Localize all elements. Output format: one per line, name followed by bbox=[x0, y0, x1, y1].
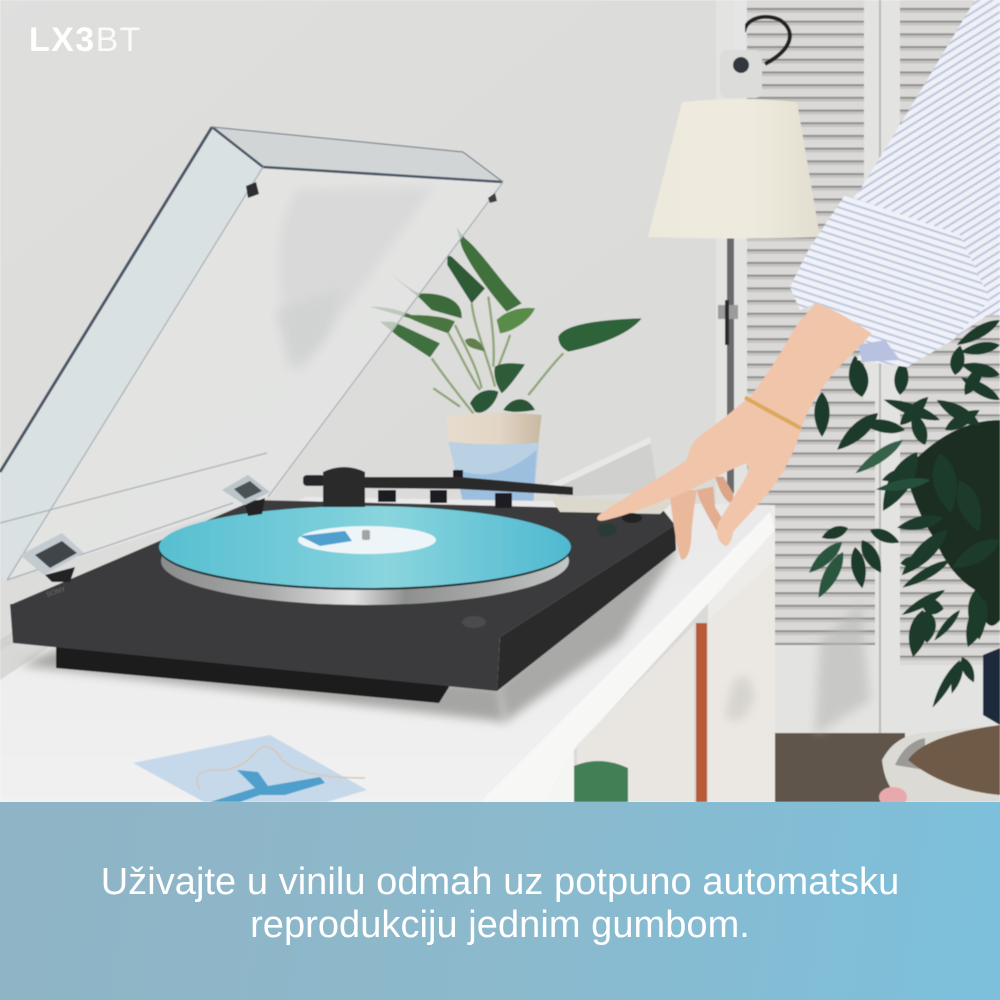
body top bbox=[10, 500, 675, 637]
power knob bbox=[597, 513, 642, 537]
tonearm bbox=[303, 467, 672, 514]
sleeve bbox=[790, 0, 1000, 367]
hinges bbox=[20, 475, 270, 582]
plant pot bbox=[879, 725, 1000, 807]
product name: LX3BT bbox=[29, 21, 142, 59]
table bbox=[0, 497, 775, 802]
lamp bbox=[648, 0, 820, 493]
caption text bbox=[101, 861, 899, 946]
caption band bbox=[0, 802, 1000, 1000]
body front bbox=[10, 604, 500, 691]
right plant bbox=[805, 315, 1000, 725]
caption text: Uživajte u vinilu odmah uz potpuno automatsku bbox=[101, 861, 899, 903]
front button bbox=[462, 616, 486, 628]
caption text: reprodukciju jednim gumbom. bbox=[250, 904, 750, 946]
sleeve behind turntable bbox=[548, 437, 658, 497]
plant on table bbox=[370, 227, 642, 503]
turntable bbox=[10, 467, 676, 703]
body side bbox=[497, 525, 676, 691]
shutters bbox=[716, 0, 1000, 802]
bracelet bbox=[745, 397, 801, 428]
lid bbox=[0, 127, 503, 580]
hand bbox=[597, 303, 872, 560]
platter and record bbox=[159, 506, 571, 605]
plinth bbox=[56, 640, 449, 703]
logo: SONY bbox=[45, 586, 67, 599]
